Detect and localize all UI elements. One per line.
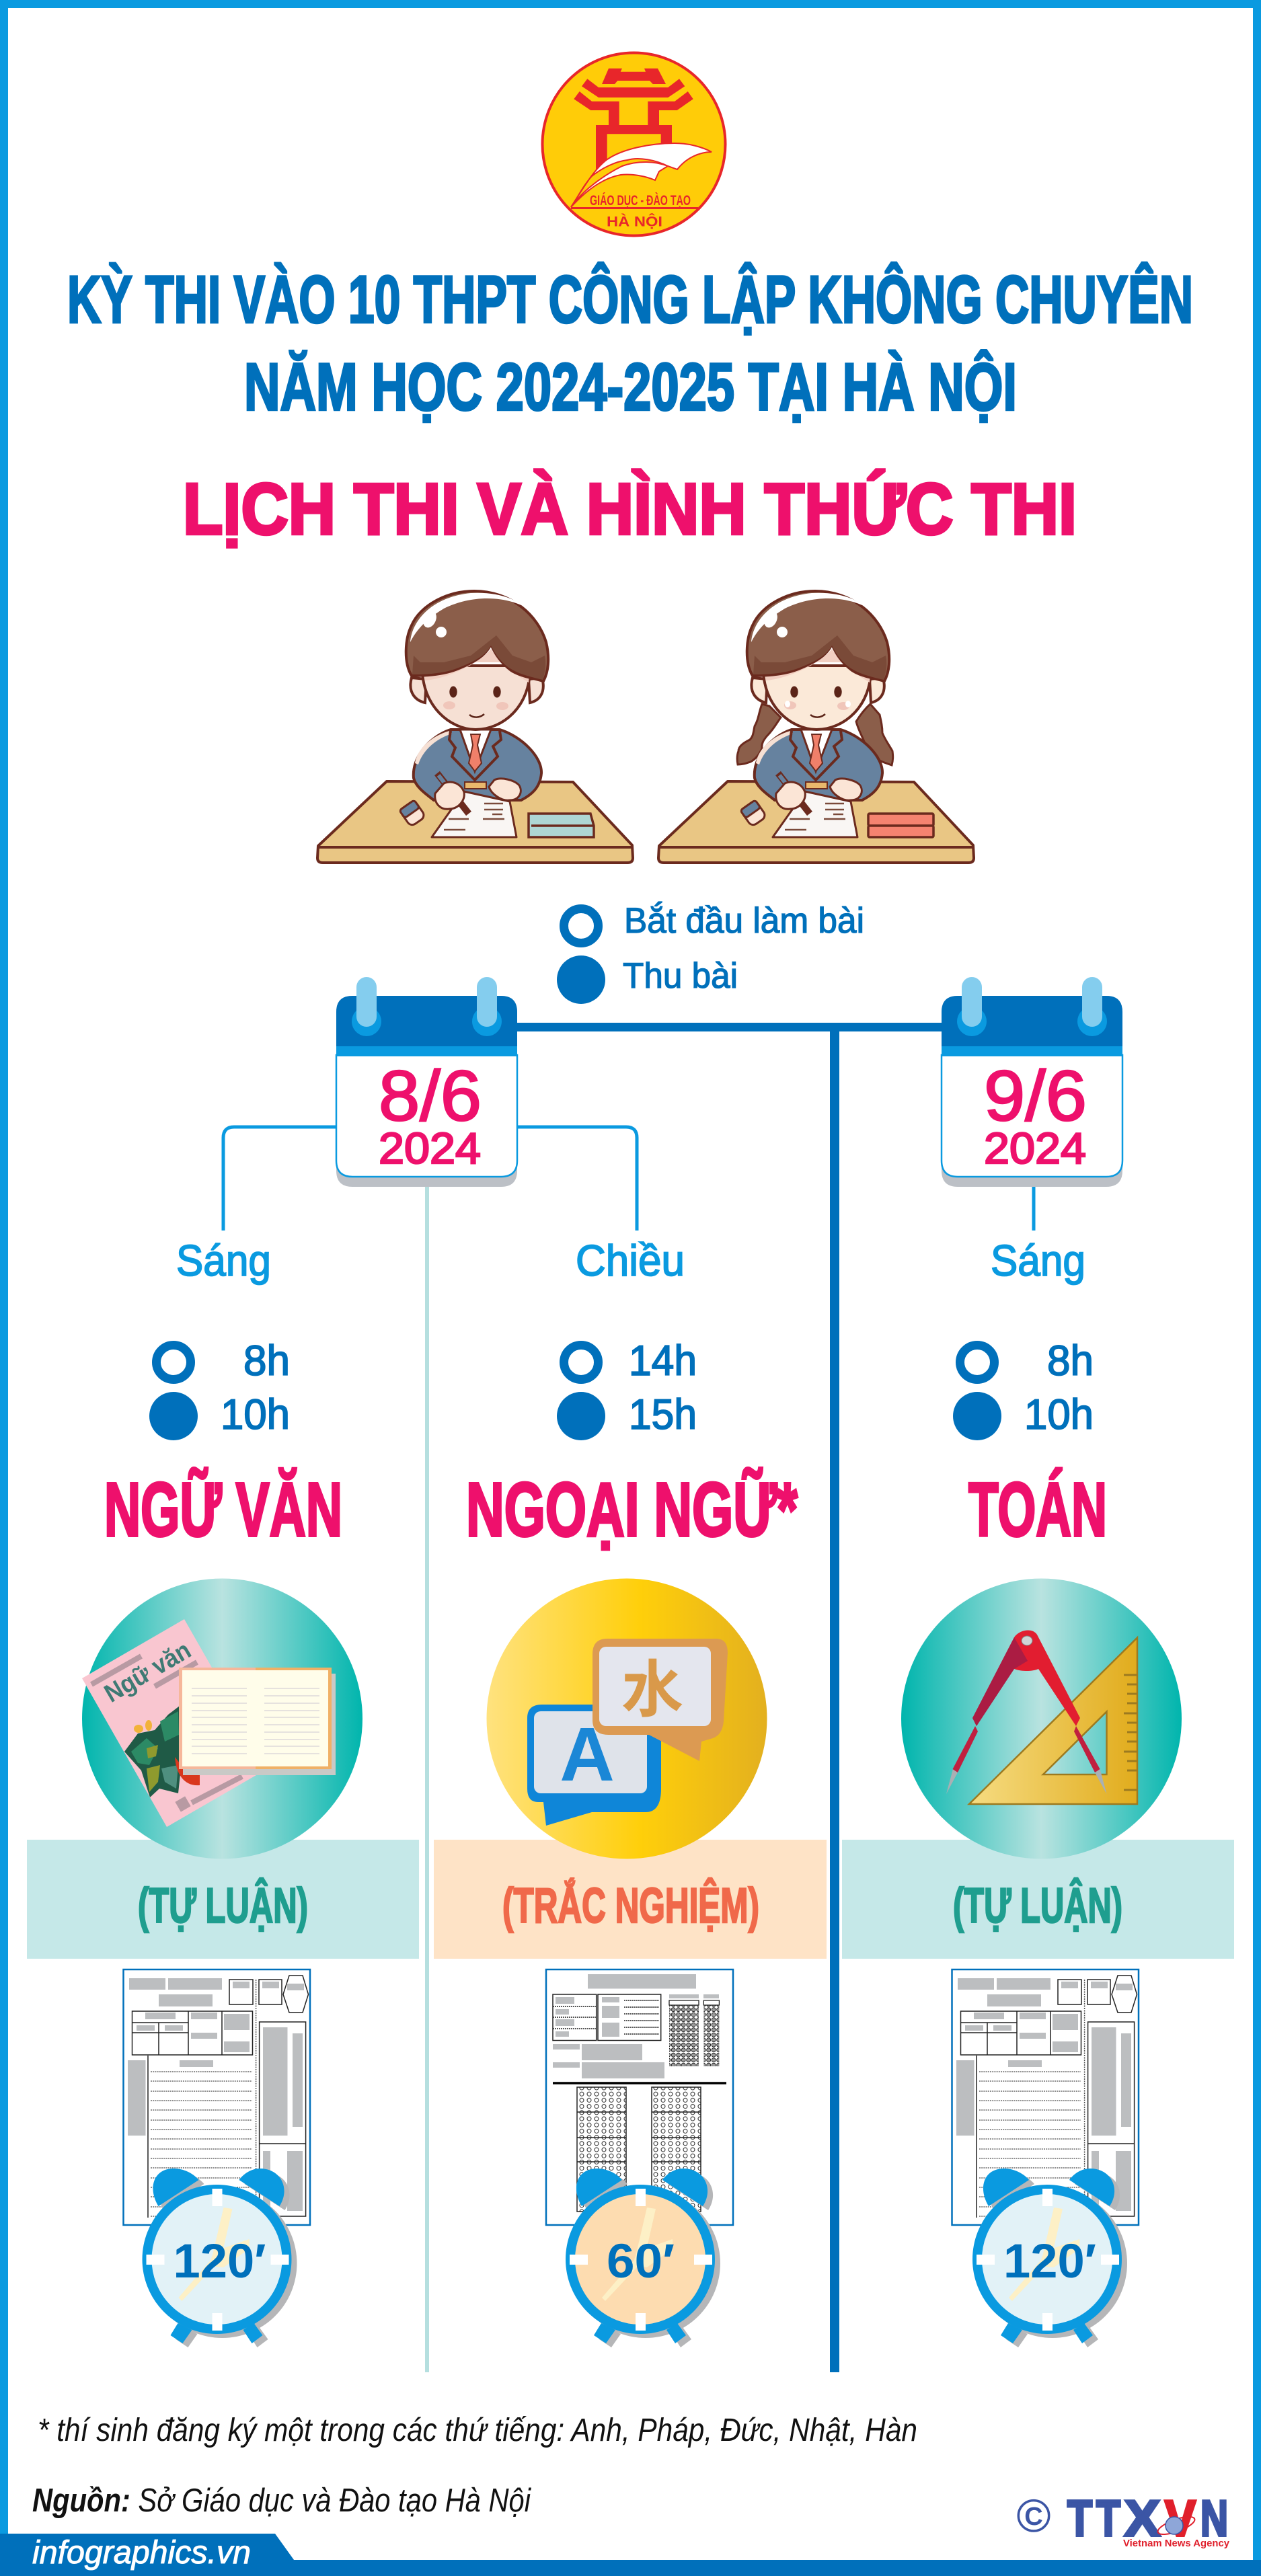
clock: 60 minutes: 60′ bbox=[607, 2235, 675, 2288]
clock: 60 minutes bbox=[570, 2169, 720, 2347]
footnote: * thí sinh đăng ký một trong các thứ tiếng: Anh, Pháp, Đức, Nhật, Hàn bbox=[38, 2413, 917, 2448]
icon: literature books bbox=[82, 1579, 362, 1859]
book cover bbox=[82, 1619, 269, 1827]
TTXVN logo: X bbox=[1124, 2490, 1160, 2546]
icon: language bubbles: 水 bbox=[621, 1656, 683, 1725]
website label: infographics.vn bbox=[32, 2535, 251, 2571]
times: Toán: 10h bbox=[1024, 1391, 1094, 1438]
compass bbox=[946, 1769, 1107, 1794]
TTXVN logo: T bbox=[1096, 2490, 1120, 2546]
legend: start label: Bắt đầu làm bài bbox=[624, 901, 864, 941]
girl braids bbox=[737, 704, 893, 765]
logo: Hanoi education department bbox=[542, 52, 725, 235]
icon: compass and set square bbox=[901, 1579, 1182, 1859]
book title: Ngữ văn bbox=[100, 1636, 196, 1708]
plant illustration bbox=[124, 1706, 200, 1797]
TTXVN logo: N bbox=[1200, 2490, 1228, 2546]
times: Toán bbox=[953, 1337, 1094, 1440]
icon: language bubbles: A bbox=[560, 1712, 615, 1797]
TTXVN logo bbox=[1018, 2490, 1230, 2549]
answer sheet: Ngoại ngữ bbox=[546, 1969, 733, 2225]
subject: Ngoại ngữ: NGOẠI NGỮ* bbox=[466, 1467, 798, 1552]
TTXVN logo: T bbox=[1067, 2490, 1092, 2546]
calendar: 8/6/2024: 8/6 bbox=[379, 1056, 482, 1136]
times: Ngoại ngữ: 14h bbox=[629, 1337, 697, 1384]
band: tự luận (Toán) bbox=[842, 1840, 1234, 1959]
footer bar bbox=[0, 2534, 1261, 2576]
subject: Ngữ văn: NGỮ VĂN bbox=[104, 1467, 342, 1552]
clock: 120 minutes (Toán): 120′ bbox=[1003, 2235, 1096, 2288]
clock: 120 minutes bbox=[147, 2169, 297, 2347]
logo: Hanoi education department: GIÁO DỤC - ĐÀO TẠO bbox=[590, 193, 691, 208]
legend bbox=[557, 901, 864, 1004]
logo: Hanoi education department: HÀ NỘI bbox=[607, 214, 662, 230]
TTXVN logo: Vietnam News Agency bbox=[1123, 2538, 1230, 2549]
clock: 120 minutes: 120′ bbox=[174, 2235, 266, 2288]
icon: teal books bbox=[529, 814, 594, 837]
session label: morning 9/6: Sáng bbox=[991, 1236, 1085, 1285]
illustration: girl student at desk bbox=[658, 591, 974, 863]
session label: morning 8/6: Sáng bbox=[176, 1236, 271, 1285]
clock: 120 minutes (Toán) bbox=[977, 2169, 1127, 2347]
answer sheet: Toán bbox=[952, 1969, 1139, 2225]
timeline connector lines bbox=[223, 1027, 1034, 2372]
calendar: 8/6/2024 bbox=[336, 977, 517, 1187]
open book bbox=[179, 1668, 256, 1769]
icon: red books bbox=[868, 814, 933, 837]
icon: language bubbles bbox=[487, 1579, 767, 1859]
times: Ngoại ngữ bbox=[557, 1337, 697, 1440]
session label: afternoon 8/6: Chiều bbox=[576, 1236, 685, 1285]
times: Ngữ văn: 8h bbox=[243, 1337, 290, 1384]
orange character speech bubble bbox=[593, 1639, 728, 1761]
title line 2: NĂM HỌC 2024-2025 TẠI HÀ NỘI bbox=[244, 350, 1017, 424]
times: Ngữ văn: 10h bbox=[221, 1391, 290, 1438]
band: tự luận (Ngữ văn): (TỰ LUẬN) bbox=[138, 1879, 308, 1933]
TTXVN logo: V bbox=[1165, 2490, 1196, 2546]
band: tự luận (Ngữ văn) bbox=[27, 1840, 419, 1959]
blue A speech bubble bbox=[527, 1705, 661, 1826]
band: trắc nghiệm: (TRẮC NGHIỆM) bbox=[502, 1879, 759, 1933]
subtitle: LỊCH THI VÀ HÌNH THỨC THI bbox=[183, 468, 1077, 549]
calendar: 9/6/2024 bbox=[942, 977, 1122, 1187]
legend: start marker bbox=[564, 909, 599, 943]
times: Ngữ văn bbox=[149, 1337, 290, 1440]
set square bbox=[969, 1638, 1137, 1804]
source: Nguồn: Sở Giáo dục và Đào tạo Hà Nội bbox=[32, 2483, 531, 2519]
subject: Toán: TOÁN bbox=[968, 1467, 1107, 1552]
TTXVN logo: C bbox=[1024, 2503, 1043, 2531]
legend: end label: Thu bài bbox=[623, 956, 738, 996]
calendar: 9/6/2024: 9/6 bbox=[984, 1056, 1087, 1136]
illustration: boy student at desk bbox=[317, 591, 633, 863]
band: tự luận (Toán): (TỰ LUẬN) bbox=[953, 1879, 1122, 1933]
times: Ngoại ngữ: 15h bbox=[629, 1391, 697, 1438]
band: trắc nghiệm bbox=[434, 1840, 827, 1959]
times: Toán: 8h bbox=[1047, 1337, 1094, 1384]
calendar: 8/6/2024: 2024 bbox=[379, 1124, 481, 1173]
legend: end marker bbox=[557, 955, 605, 1004]
calendar: 9/6/2024: 2024 bbox=[984, 1124, 1086, 1173]
answer sheet: Ngữ văn bbox=[124, 1969, 310, 2225]
